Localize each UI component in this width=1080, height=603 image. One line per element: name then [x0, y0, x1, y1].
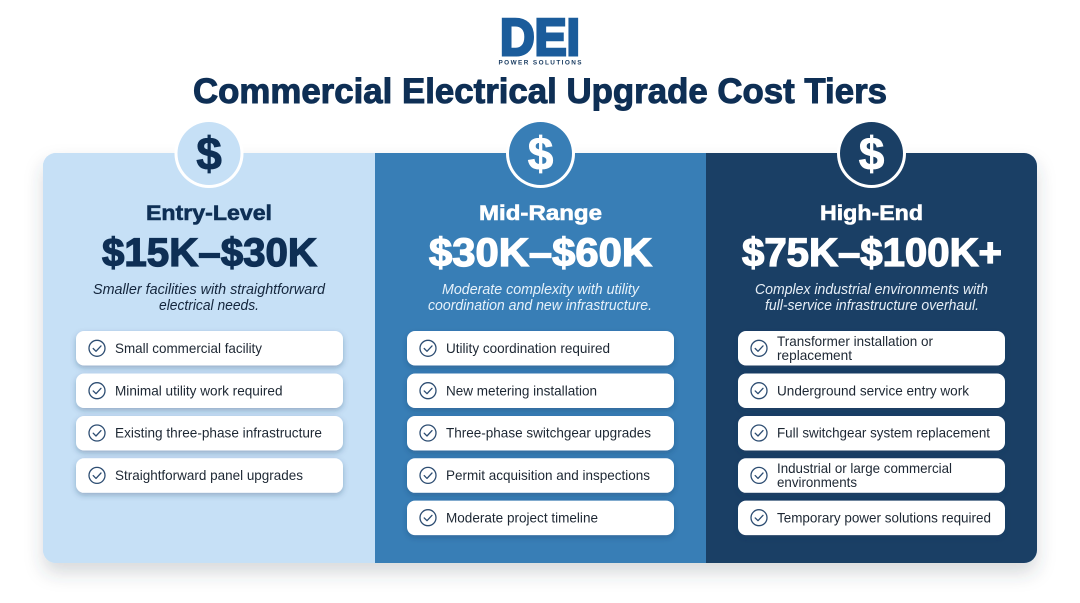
description: [428, 281, 652, 314]
description: Complex industrial environments with: [755, 281, 988, 298]
title: Commercial Electrical Upgrade Cost Tiers: [193, 72, 887, 111]
description: electrical needs.: [159, 297, 259, 314]
panel background: navy: [706, 153, 1037, 563]
card: Existing three-phase infrastructure: [76, 416, 343, 450]
panel shadow: [43, 153, 1037, 563]
card: Utility coordination required: Utility coordination required: [446, 340, 610, 356]
card: Transformer installation or replacement: Transformer installation or: [777, 333, 933, 349]
heading: High-End: [820, 201, 923, 225]
icon: dollar badge dark: $: [859, 128, 884, 180]
card: Temporary power solutions required: Temporary power solutions required: [777, 509, 991, 525]
card: Underground service entry work: [738, 374, 1005, 408]
card: Small commercial facility: [76, 331, 343, 366]
description: [755, 281, 988, 314]
card: Minimal utility work required: [76, 374, 343, 408]
card: Temporary power solutions required: [738, 501, 1005, 535]
panel background: mid blue: [375, 153, 706, 563]
card: New metering installation: New metering installation: [446, 382, 597, 398]
panel: Mid-Range: [375, 119, 706, 563]
card: Three-phase switchgear upgrades: [407, 416, 674, 450]
description: Moderate complexity with utility: [442, 281, 640, 298]
description: Smaller facilities with straightforward: [93, 281, 326, 298]
price: $75K–$100K+: [742, 231, 1002, 275]
card: Straightforward panel upgrades: Straightforward panel upgrades: [115, 467, 303, 483]
card: Transformer installation or replacement: [738, 331, 1005, 366]
card: Full switchgear system replacement: [738, 416, 1005, 450]
heading: Mid-Range: [479, 201, 602, 225]
logo: DEI Power Solutions: DEI: [500, 9, 580, 67]
card: Moderate project timeline: [407, 501, 674, 535]
card: Industrial or large commercial environments: [738, 458, 1005, 493]
description: coordination and new infrastructure.: [428, 297, 652, 314]
icon: dollar badge dark: [837, 119, 906, 188]
price: $30K–$60K: [429, 231, 653, 275]
card: Permit acquisition and inspections: [407, 458, 674, 493]
card: Industrial or large commercial environments: Industrial or large commercial: [777, 460, 952, 476]
card: Underground service entry work: Underground service entry work: [777, 382, 970, 398]
card: Small commercial facility: Small commercial facility: [115, 340, 262, 356]
card: Moderate project timeline: Moderate project timeline: [446, 509, 598, 525]
card: Utility coordination required: [407, 331, 674, 366]
icon: dollar badge mid: $: [528, 128, 553, 180]
price: $15K–$30K: [102, 231, 317, 275]
description: full-service infrastructure overhaul.: [765, 297, 979, 314]
card: Straightforward panel upgrades: [76, 458, 343, 493]
card: Three-phase switchgear upgrades: Three-phase switchgear upgrades: [446, 425, 651, 441]
card: Full switchgear system replacement: Full switchgear system replacement: [777, 425, 990, 441]
card: New metering installation: [407, 374, 674, 408]
card: Existing three-phase infrastructure: Existing three-phase infrastructure: [115, 425, 322, 441]
card: Industrial or large commercial environments: environments: [777, 474, 857, 490]
panel: High-End: [706, 119, 1037, 563]
card: Transformer installation or replacement: replacement: [777, 347, 852, 363]
icon: dollar badge light: [174, 119, 244, 188]
icon: dollar badge mid: [506, 119, 575, 188]
description: [93, 281, 326, 314]
icon: dollar badge light: $: [196, 128, 222, 180]
heading: Entry-Level: [146, 201, 272, 225]
panel: Entry-Level: [43, 119, 375, 563]
panel background: light blue: [43, 153, 375, 563]
card: Permit acquisition and inspections: Permit acquisition and inspections: [446, 467, 650, 483]
card: Minimal utility work required: Minimal utility work required: [115, 382, 282, 398]
logo: DEI Power Solutions: POWER SOLUTIONS: [498, 60, 582, 66]
